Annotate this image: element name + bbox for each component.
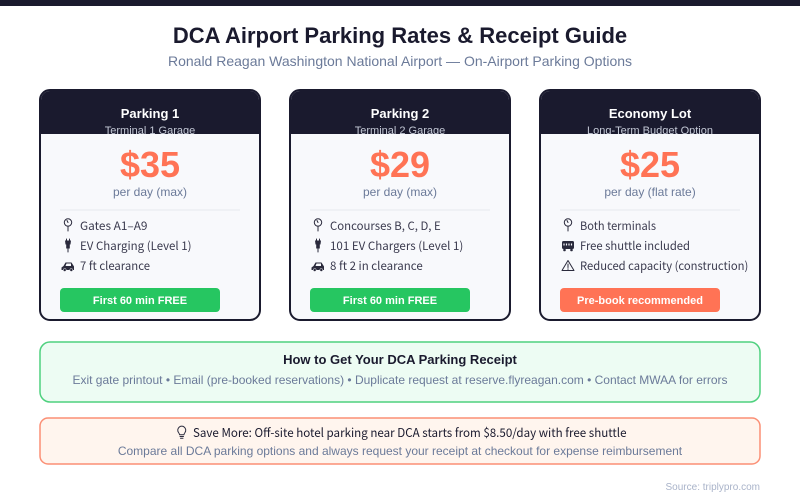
icon: warning [562,260,574,270]
panel: save more [40,418,760,464]
subtitle: Ronald Reagan Washington National Airport — On-Airport Parking Options [168,53,632,69]
save more heading: Save More: Off-site hotel parking near DCA starts from $8.50/day with free shuttle [193,424,627,441]
receipt details: Exit gate printout • Email (pre-booked reservations) • Duplicate request at reserve.flyreagan.com • Contact MWAA for errors [72,373,728,387]
title: DCA Airport Parking Rates & Receipt Guide [173,23,627,48]
card subheading: Long-Term Budget Option [587,125,713,137]
feature list: Gates A1–A9 [80,218,148,234]
price: $25 [620,144,680,185]
panel: Economy Lot [540,90,760,320]
badge [560,288,720,312]
badge: Pre-book recommended [577,295,703,307]
feature list [62,218,192,274]
card heading: Parking 2 [371,106,429,121]
card subheading: Terminal 2 Garage [355,125,445,137]
badge: First 60 min FREE [93,295,187,307]
icon: bus [562,241,574,251]
price unit: per day (max) [113,185,187,199]
feature list: Both terminals [580,218,656,234]
feature list [562,218,748,274]
feature list: 7 ft clearance [80,258,150,274]
price: $29 [370,144,430,185]
feature list [312,218,463,274]
card heading: Economy Lot [609,106,692,121]
receipt heading: How to Get Your DCA Parking Receipt [283,352,518,367]
price unit: per day (max) [363,185,437,199]
feature list: Reduced capacity (construction) [580,258,748,274]
card subheading: Terminal 1 Garage [105,125,195,137]
panel: receipt guide [40,342,760,402]
feature list: Concourses B, C, D, E [330,218,441,234]
badge: First 60 min FREE [343,295,437,307]
feature list: 101 EV Chargers (Level 1) [330,238,463,254]
source: Source: triplypro.com [666,482,760,493]
price: $35 [120,144,180,185]
badge [60,288,220,312]
save more details: Compare all DCA parking options and always request your receipt at checkout for expense reimbursement [118,444,683,458]
icon: light bulb [178,426,186,438]
feature list: 8 ft 2 in clearance [330,258,423,274]
price unit: per day (flat rate) [604,185,696,199]
badge [310,288,470,312]
card heading: Parking 1 [121,106,179,121]
feature list: EV Charging (Level 1) [80,238,192,254]
feature list: Free shuttle included [580,238,690,254]
panel: Parking 2 [290,90,510,320]
panel: Parking 1 [40,90,260,320]
